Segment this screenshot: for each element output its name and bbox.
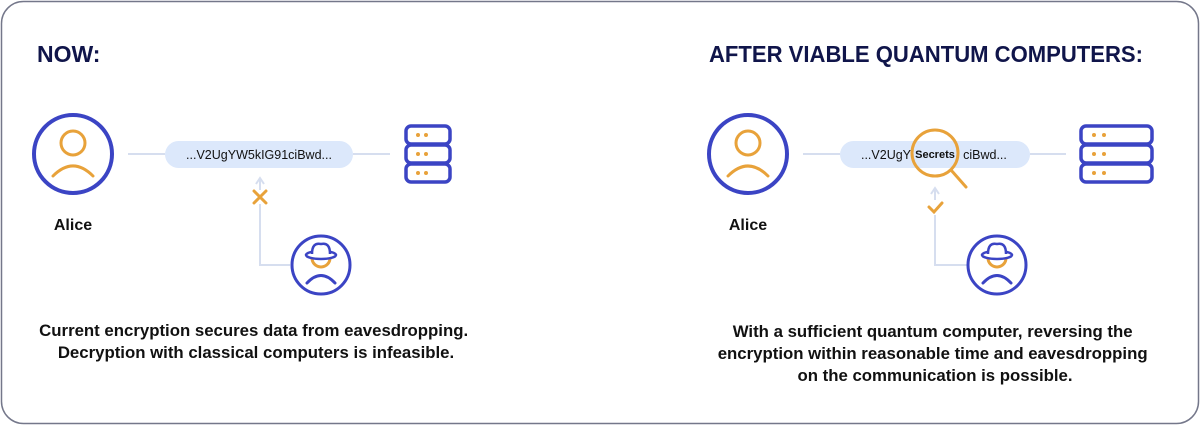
caption: after quantum: on the communication is possible.: [797, 366, 1073, 385]
icon: server: [1081, 126, 1152, 182]
panel: now: [34, 115, 473, 362]
ciphertext pill with secret revealed: Secrets: [915, 149, 955, 161]
icon: alice: [709, 115, 787, 193]
ciphertext pill with secret revealed: ciBwd...: [963, 148, 1007, 162]
ciphertext pill with secret revealed: [840, 141, 1030, 168]
panel: after quantum: [709, 115, 1152, 385]
title: now: NOW:: [37, 41, 100, 67]
label: alice: Alice: [729, 217, 767, 234]
title: after quantum: AFTER VIABLE QUANTUM COMPUTERS:: [709, 41, 1143, 67]
icon: alice: [34, 115, 112, 193]
label: alice: Alice: [54, 217, 92, 234]
caption: after quantum: encryption within reasonable time and eavesdropping: [718, 344, 1148, 363]
arrow: blocked eavesdrop: [254, 178, 290, 265]
icon: server: [406, 126, 450, 182]
icon: magnifier: [912, 130, 966, 187]
ciphertext pill: ...V2UgYW5kIG91ciBwd...: [186, 148, 332, 162]
ciphertext pill: [165, 141, 353, 168]
icon: eavesdropper: [292, 236, 350, 294]
caption: now: Decryption with classical computers is infeasible.: [58, 343, 454, 362]
ciphertext pill with secret revealed: ...V2UgY: [861, 148, 912, 162]
caption: now: Current encryption secures data from eavesdropping.: [39, 321, 468, 340]
icon: eavesdropper: [968, 236, 1026, 294]
caption: after quantum: With a sufficient quantum computer, reversing the: [733, 322, 1133, 341]
arrow: successful eavesdrop: [927, 188, 967, 265]
